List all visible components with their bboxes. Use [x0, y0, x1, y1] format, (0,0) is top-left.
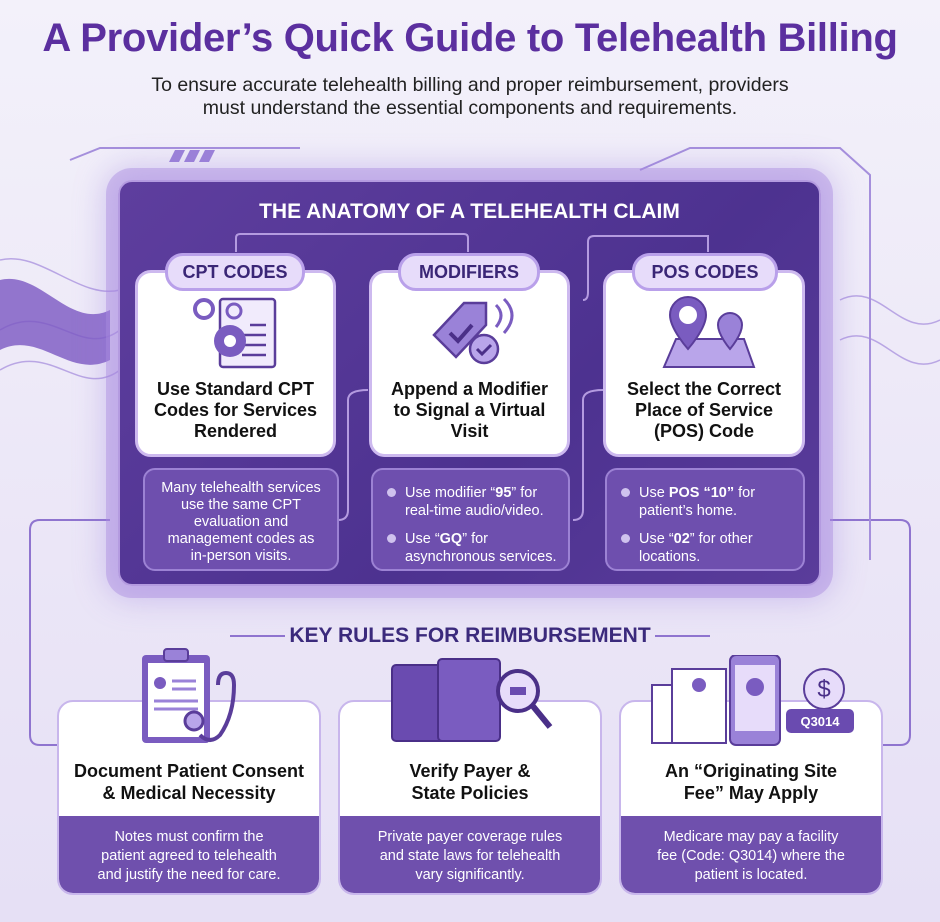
card: consent: Notes must confirm the	[114, 829, 264, 845]
card: payer policies: State Policies	[411, 783, 529, 803]
icon: hospital phone dollar	[651, 655, 854, 746]
icon: books and magnifier	[391, 658, 552, 742]
card: CPT codes	[135, 270, 336, 457]
card: payer policies: Private payer coverage rules	[378, 829, 562, 845]
card: POS codes: Place of Service	[635, 400, 773, 420]
lower: POS bullets	[605, 468, 805, 571]
card: originating site fee: patient is located.	[695, 867, 807, 883]
card: consent: & Medical Necessity	[102, 783, 276, 803]
tab: POS codes: POS CODES	[651, 262, 759, 282]
tab: modifiers: MODIFIERS	[419, 262, 519, 282]
lower: CPT description: evaluation and	[194, 514, 288, 530]
card: payer policies: and state laws for telehealth	[380, 848, 560, 864]
icon: tag with check	[432, 298, 514, 364]
card: modifiers	[369, 270, 570, 457]
card: CPT codes: Use Standard CPT	[157, 379, 314, 399]
card: consent	[57, 700, 321, 895]
card: originating site fee: Fee” May Apply	[684, 783, 818, 803]
panel: anatomy of a claim	[118, 180, 821, 586]
lower: CPT description: management codes as	[168, 531, 314, 547]
tab: CPT codes: CPT CODES	[182, 262, 288, 282]
title: A Provider’s Quick Guide to Telehealth Billing	[42, 16, 898, 60]
card: consent: patient agreed to telehealth	[101, 848, 277, 864]
card: payer policies	[338, 700, 602, 895]
icon: clipboard stethoscope	[142, 648, 236, 743]
card: consent: Document Patient Consent	[74, 761, 304, 781]
subtitle	[151, 74, 789, 119]
lower: CPT description: in-person visits.	[191, 548, 291, 564]
subtitle: must understand the essential components and requirements.	[203, 97, 737, 119]
icon: hospital phone dollar: $	[817, 676, 831, 703]
lower: POS bullets: Use “02” for other locations.	[639, 531, 753, 565]
lower: modifier bullets: Use modifier “95” for real-time audio/video.	[405, 485, 544, 519]
card: payer policies: Verify Payer &	[409, 761, 531, 781]
icon: gears document	[193, 298, 276, 368]
tab: modifiers	[398, 253, 540, 291]
heading: key rules: KEY RULES FOR REIMBURSEMENT	[289, 624, 651, 647]
lower: CPT description: use the same CPT	[181, 497, 301, 513]
lower: POS bullets: Use POS “10” for patient’s home.	[639, 485, 755, 519]
lower: modifier bullets	[371, 468, 570, 571]
card: modifiers: to Signal a Virtual	[394, 400, 545, 420]
card: originating site fee: An “Originating Site	[665, 761, 837, 781]
card: payer policies: vary significantly.	[415, 867, 525, 883]
card: originating site fee	[619, 700, 883, 895]
card: originating site fee: Medicare may pay a facility	[664, 829, 838, 845]
lower: modifier bullets: Use “GQ” for asynchronous services.	[405, 531, 557, 565]
subtitle: To ensure accurate telehealth billing and proper reimbursement, providers	[151, 74, 789, 96]
card: modifiers: Visit	[451, 421, 488, 441]
card: POS codes	[603, 270, 805, 457]
card: originating site fee: fee (Code: Q3014) where the	[657, 848, 845, 864]
icon: hospital phone dollar: Q3014	[800, 714, 840, 729]
card: POS codes: Select the Correct	[627, 379, 781, 399]
icon: map pins	[662, 296, 756, 368]
card: consent: and justify the need for care.	[98, 867, 280, 883]
card: POS codes: (POS) Code	[654, 421, 754, 441]
tab: CPT codes	[165, 253, 305, 291]
tab: POS codes	[632, 253, 778, 291]
lower: CPT description	[143, 468, 339, 571]
heading: anatomy: THE ANATOMY OF A TELEHEALTH CLAIM	[259, 200, 680, 223]
card: CPT codes: Rendered	[194, 421, 277, 441]
card: CPT codes: Codes for Services	[154, 400, 317, 420]
lower: CPT description: Many telehealth services	[161, 480, 321, 496]
connector lines	[235, 233, 709, 521]
card: modifiers: Append a Modifier	[391, 379, 548, 399]
